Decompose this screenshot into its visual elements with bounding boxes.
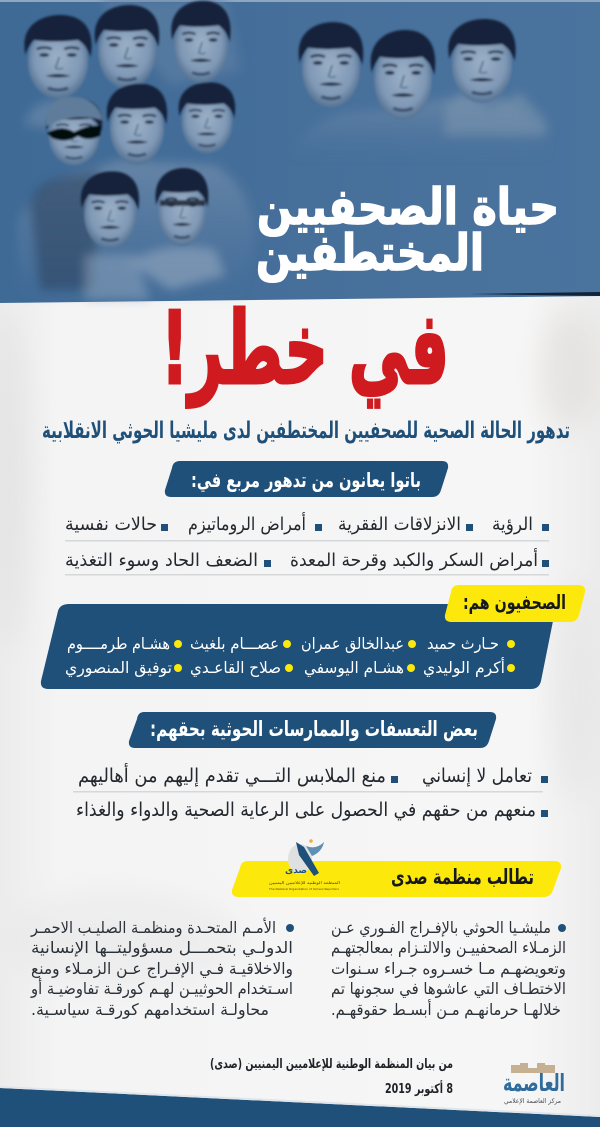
- list: health conditions: أمراض الروماتيزم: [188, 512, 306, 535]
- list: health conditions: أمراض السكر والكبد وقرحة المعدة: [290, 548, 538, 571]
- names: صلاح القاعـدي: [190, 658, 281, 678]
- banner: Sada demands: تطالب منظمة صدى: [391, 865, 534, 889]
- names: عبدالخالق عمران: [301, 634, 404, 654]
- logo: Sada: [268, 839, 340, 891]
- column: demand to the United Nations: والاخلاقيـة فـي الإفـراج عـن الزمـلاء ومنع: [31, 959, 293, 979]
- title: المختطفين: [256, 224, 484, 283]
- logo: Al-Asima media center: [503, 1063, 565, 1105]
- names: هشـام طرمــــوم: [67, 634, 170, 654]
- bottom band: [0, 1086, 600, 1127]
- column: demand to the Houthi militia: مليشـيا الحوثي بالإفـراج الفـوري عـن: [331, 918, 551, 938]
- section heading: deterioration: [165, 461, 448, 497]
- names: أكرم الوليدي: [423, 657, 505, 678]
- panel: the journalists: [41, 585, 585, 689]
- column: demand to the Houthi militia: الاختطـاف التي عاشوها في سجونها تم: [331, 979, 566, 999]
- section heading: abuses: [129, 712, 496, 748]
- list: abuses: [73, 763, 548, 821]
- logo: Sada: The National Organization of Yemeni Reporters: [268, 887, 339, 891]
- list: abuses: تعامل لا إنساني: [422, 765, 532, 788]
- section heading: abuses: بعض التعسفات والممارسات الحوثية بحقهم:: [150, 717, 478, 741]
- column: demand to the Houthi militia: [331, 918, 566, 1020]
- tag: journalists are: [445, 585, 585, 622]
- names: حـارث حميد: [427, 634, 499, 654]
- portraits: group of eight journalists: [18, 0, 255, 300]
- title: [256, 178, 559, 283]
- names: [65, 634, 515, 678]
- column: demand to the United Nations: اسـتخدام الحوثييـن لهـم كورقـة تفاوضيـة أو: [30, 978, 293, 999]
- logo: Al-Asima media center: مركز العاصمة الإعلامي: [504, 1097, 561, 1105]
- list: health conditions: الانزلاقات الفقرية: [338, 514, 461, 535]
- logo: Sada: صدى: [285, 866, 307, 876]
- column: demand to the United Nations: الأمـم المتحـدة ومنظمـة الصليـب الاحمـر: [30, 917, 276, 938]
- column: demand to the Houthi militia: الزمـلاء الصحفييـن والالتـزام بمعالجتهـم: [331, 938, 566, 958]
- header panel: [0, 0, 600, 303]
- source note: 8 أكتوبر 2019: [385, 1080, 453, 1097]
- list: health conditions: [65, 512, 549, 576]
- list: health conditions: الرؤية: [492, 514, 533, 535]
- list: abuses: منع الملابس التـــي تقدم إليهم من أهاليهم: [78, 763, 386, 788]
- column: demand to the United Nations: [30, 917, 294, 1020]
- column: demand to the United Nations: الدولـي بتحمـــل مسؤوليتــها الإنسانية: [31, 938, 293, 958]
- logo: Sada: المنظمة الوطنية للإعلاميين اليمنيين: [269, 880, 340, 886]
- list: health conditions: حالات نفسية: [65, 514, 157, 535]
- column: demand to the Houthi militia: وتعويضهـم مـا خسـروه جـراء سـنوات: [331, 959, 566, 979]
- portraits: three journalists: [290, 19, 552, 160]
- list: abuses: منعهم من حقهم في الحصول على الرعاية الصحية والدواء والغذاء: [76, 799, 536, 821]
- source note: من بيان المنظمة الوطنية للإعلاميين اليمنيين (صدى): [210, 1057, 453, 1072]
- list: health conditions: الضعف الحاد وسوء التغذية: [65, 550, 258, 571]
- column: demand to the Houthi militia: خلالهـا حرمانهـم مـن أبسـط حقوقهـم.: [331, 999, 561, 1020]
- column: demand to the United Nations: محاولـة استخدامهم كورقـة سياسـية.: [31, 1000, 269, 1020]
- names: عصـــام بلغيث: [190, 634, 279, 653]
- names: هشـام اليوسفي: [304, 658, 404, 678]
- names: توفيق المنصوري: [65, 658, 172, 678]
- logo: Al-Asima media center: العاصمة: [503, 1069, 565, 1097]
- banner: Sada demands: [232, 839, 561, 897]
- section heading: deterioration: باتوا يعانون من تدهور مربع في:: [191, 468, 421, 493]
- source note: [210, 1057, 453, 1097]
